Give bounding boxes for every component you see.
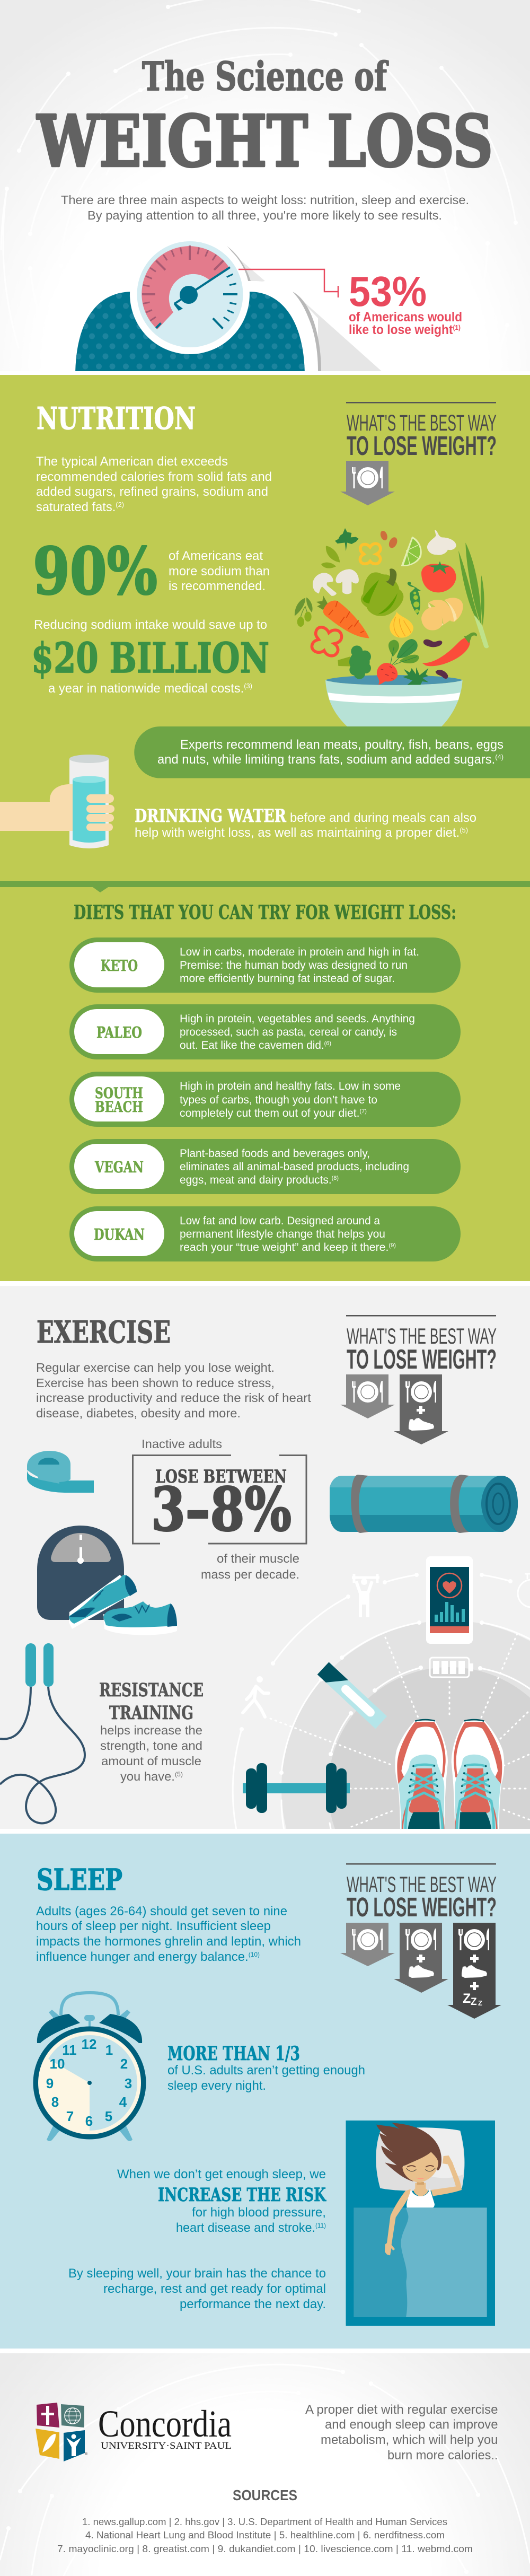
- callout pill: experts recommend: and nuts, while limiting trans fats, sodium and added sugars.: [157, 752, 498, 767]
- text: closing statement: and enough sleep can improve: [325, 2417, 498, 2432]
- text: typical american diet: saturated fats.: [36, 500, 117, 514]
- best way block: step three: Z: [463, 1991, 471, 2006]
- diet card: south beach: BEACH: [95, 1098, 143, 1116]
- text: closing statement: [305, 2403, 498, 2463]
- text: resistance training: [99, 1679, 204, 1783]
- text: typical american diet: added sugars, refined grains, sodium and: [36, 485, 268, 499]
- icon: phone with fitness app: [426, 1556, 473, 1644]
- text: adults sleep hours: Adults (ages 26-64) should get seven to nine: [36, 1904, 287, 1918]
- stat box: lose between 3-8 percent: Inactive adults: [142, 1437, 222, 1451]
- text: drinking water: [135, 805, 476, 840]
- diet card: vegan: VEGAN: [94, 1158, 144, 1176]
- diet card: paleo: (6): [324, 1040, 331, 1047]
- diet card: keto: more efficiently burning fat instead of sugar.: [180, 972, 395, 985]
- text: sleeping well: performance the next day.: [180, 2297, 326, 2311]
- diet card: south beach: completely cut them out of your diet.: [180, 1107, 358, 1119]
- best way block: step two: [340, 1315, 497, 1444]
- text: adults sleep hours: [36, 1904, 301, 1964]
- callout pill: experts recommend: (4): [495, 753, 504, 761]
- icon: weightlifter: [352, 1574, 379, 1617]
- text: resistance training: you have.: [120, 1769, 173, 1783]
- diet card: dukan: permanent lifestyle change that helps you: [180, 1228, 385, 1240]
- icon: alarm clock: 4: [119, 2094, 127, 2110]
- stat box: lose between 3-8 percent: of their muscle: [217, 1552, 299, 1565]
- callout pill: experts recommend: [134, 726, 530, 778]
- callout: 53 percent: of Americans would: [349, 310, 462, 325]
- diet card: dukan: (9): [388, 1242, 396, 1249]
- sources list: 7. mayoclinic.org | 8. greatist.com | 9. dukandiet.com | 10. livescience.com | 11. webmd.com: [57, 2544, 473, 2554]
- icon: alarm clock: 8: [51, 2094, 59, 2110]
- stat: 20 billion: $20 BILLION: [31, 634, 269, 682]
- text: resistance training: amount of muscle: [101, 1754, 201, 1768]
- text: typical american diet: recommended calories from solid fats and: [36, 470, 272, 484]
- panel: footer: [0, 2349, 530, 2576]
- text: adults sleep hours: influence hunger and energy balance.: [36, 1950, 249, 1964]
- text: sleeping well: [68, 2266, 326, 2311]
- heading: nutrition: NUTRITION: [37, 401, 196, 436]
- text: resistance training: (5): [175, 1771, 183, 1778]
- text: resistance training: TRAINING: [109, 1702, 193, 1724]
- callout: 53 percent: (1): [453, 323, 461, 331]
- sources list: 4. National Heart Lung and Blood Institute | 5. healthline.com | 6. nerdfitness.com: [85, 2530, 445, 2540]
- heading: sleep: SLEEP: [37, 1862, 122, 1897]
- icon: hand holding water glass: [0, 755, 114, 848]
- icon: stopwatch: [518, 1574, 530, 1607]
- stat: 20 billion: [31, 618, 269, 696]
- icon: alarm clock: 1: [105, 2042, 113, 2058]
- text: drinking water: before and during meals can also: [290, 811, 476, 825]
- diet card: paleo: out. Eat like the cavemen did.: [180, 1039, 325, 1052]
- stat box: lose between 3-8 percent: LOSE BETWEEN: [155, 1466, 287, 1487]
- text: adults sleep hours: impacts the hormones ghrelin and leptin, which: [36, 1934, 301, 1949]
- stat: 20 billion: a year in nationwide medical costs.: [48, 681, 245, 696]
- text: regular exercise: increase productivity and reduce the risk of heart: [36, 1391, 312, 1405]
- panel: header: [0, 0, 530, 376]
- text: closing statement: burn more calories..: [387, 2448, 498, 2463]
- icon: yoga mat: [330, 1475, 518, 1533]
- stat box: lose between 3-8 percent: 3–8%: [151, 1475, 292, 1545]
- diet card: south beach: (7): [359, 1108, 367, 1115]
- diet card: paleo: PALEO: [96, 1023, 142, 1041]
- diet card: dukan: DUKAN: [94, 1225, 145, 1243]
- icon: alarm clock: 7: [66, 2108, 74, 2124]
- text: drinking water: DRINKING WATER: [135, 805, 287, 827]
- icon: energy bar: [317, 1662, 387, 1729]
- title: The Science of: [142, 54, 388, 100]
- diet card: keto: KETO: [101, 957, 138, 975]
- stat: more than one third: sleep every night.: [167, 2079, 266, 2093]
- text: adults sleep hours: hours of sleep per night. Insufficient sleep: [36, 1919, 271, 1933]
- intro text: [61, 193, 469, 222]
- icon: measuring tape: [27, 1451, 94, 1493]
- logo: Concordia University Saint Paul: [36, 2403, 232, 2461]
- stat: 90 percent: of Americans eat: [169, 549, 263, 563]
- text: resistance training: RESISTANCE: [99, 1679, 204, 1701]
- text: closing statement: metabolism, which will help you: [321, 2433, 498, 2447]
- text: drinking water: (5): [460, 826, 468, 834]
- icon: jump rope: [0, 1643, 85, 1823]
- panel: exercise: [0, 1281, 530, 1957]
- text: resistance training: helps increase the: [100, 1723, 202, 1737]
- stat box: lose between 3-8 percent: [132, 1437, 306, 1581]
- icon: dumbbell: [243, 1763, 350, 1813]
- sources list: 1. news.gallup.com | 2. hhs.gov | 3. U.S. Department of Health and Human Services: [82, 2517, 447, 2527]
- callout: 53 percent: like to lose weight: [349, 322, 463, 337]
- callout: 53 percent: [238, 268, 462, 337]
- diet card: south beach: [69, 1072, 461, 1127]
- panel: nutrition: [0, 371, 530, 1281]
- text: adults sleep hours: (10): [249, 1951, 260, 1958]
- diet card: vegan: eliminates all animal-based products, including: [180, 1161, 409, 1173]
- diet card: paleo: [69, 1004, 461, 1059]
- text: sleeping well: By sleeping well, your brain has the chance to: [68, 2266, 326, 2281]
- text: typical american diet: The typical American diet exceeds: [36, 454, 228, 469]
- diet card: vegan: Plant-based foods and beverages only,: [180, 1147, 370, 1160]
- divider band with notch: [0, 881, 530, 892]
- diet card: keto: Low in carbs, moderate in protein and high in fat.: [180, 946, 419, 958]
- icon: alarm clock: [33, 1993, 146, 2141]
- diet card: south beach: SOUTH: [95, 1084, 143, 1102]
- text: increase the risk: (11): [315, 2222, 326, 2229]
- diet card: dukan: reach your “true weight” and keep it there.: [180, 1241, 386, 1254]
- text: typical american diet: [36, 454, 272, 514]
- title: [36, 54, 493, 183]
- intro text: There are three main aspects to weight loss: nutrition, sleep and exercise.: [61, 193, 469, 207]
- diet card: south beach: types of carbs, though you don’t have to: [180, 1094, 377, 1106]
- heading: exercise: EXERCISE: [37, 1315, 171, 1350]
- text: resistance training: strength, tone and: [100, 1739, 202, 1753]
- text: closing statement: A proper diet with regular exercise: [305, 2403, 498, 2417]
- diet card: vegan: (8): [332, 1175, 339, 1181]
- icon: alarm clock: 3: [125, 2075, 132, 2091]
- diet card: dukan: [69, 1206, 461, 1261]
- icon: runner: [243, 1677, 269, 1717]
- icon: weighing scale and sneakers: [37, 1526, 177, 1635]
- diet card: vegan: eggs, meat and dairy products.: [180, 1174, 332, 1186]
- icon: bathroom scale with dial: [63, 234, 382, 376]
- diet card: south beach: High in protein and healthy fats. Low in some: [180, 1080, 401, 1092]
- best way block: step three: Z: [471, 1996, 477, 2008]
- icon: alarm clock: 10: [50, 2056, 65, 2072]
- icon: alarm clock: 12: [82, 2036, 96, 2052]
- text: regular exercise: [36, 1361, 312, 1420]
- text: increase the risk: When we don’t get enough sleep, we: [117, 2167, 326, 2181]
- text: sleeping well: recharge, rest and get ready for optimal: [103, 2282, 326, 2296]
- text: typical american diet: (2): [116, 501, 124, 509]
- callout: 53 percent: 53%: [349, 268, 427, 315]
- diet card: dukan: Low fat and low carb. Designed around a: [180, 1215, 380, 1227]
- diet card: paleo: processed, such as pasta, cereal or candy, is: [180, 1026, 397, 1038]
- text: increase the risk: for high blood pressure,: [192, 2205, 326, 2220]
- best way block: step three: Z: [478, 1999, 482, 2007]
- illustration: salad bowl with vegetables: [295, 528, 489, 728]
- icon: alarm clock: 5: [105, 2108, 112, 2124]
- text: increase the risk: INCREASE THE RISK: [158, 2184, 326, 2206]
- icon: battery: [430, 1658, 473, 1677]
- icon: alarm clock: 9: [46, 2075, 54, 2091]
- logo: Concordia University Saint Paul: UNIVERSITY·SAINT PAUL: [101, 2440, 232, 2451]
- stat box: lose between 3-8 percent: mass per decade.: [201, 1567, 299, 1581]
- illustration: radial gauge with circles: [233, 1573, 530, 1957]
- diet card: keto: [69, 937, 461, 993]
- icon: alarm clock: 11: [62, 2042, 77, 2058]
- stat: 90 percent: [33, 533, 270, 609]
- text: increase the risk: heart disease and stroke.: [176, 2221, 319, 2235]
- stat: more than one third: [167, 2043, 365, 2093]
- text: regular exercise: Regular exercise can help you lose weight.: [36, 1361, 275, 1374]
- logo: Concordia University Saint Paul: Concordia: [98, 2403, 232, 2445]
- logo: Concordia University Saint Paul: ®: [85, 2452, 88, 2456]
- text: drinking water: help with weight loss, as well as maintaining a proper diet.: [135, 826, 461, 840]
- best way block: step three: [340, 1863, 501, 2019]
- illustration: woman sleeping in bed: [346, 2121, 495, 2326]
- sources list: [57, 2487, 473, 2554]
- stat: 90 percent: more sodium than: [169, 564, 270, 579]
- stat: 20 billion: Reducing sodium intake would save up to: [34, 618, 267, 632]
- sources list: SOURCES: [233, 2487, 297, 2503]
- icon: alarm clock: 6: [85, 2113, 93, 2129]
- icon: sneakers top view: [395, 1720, 504, 1831]
- stat: 20 billion: (3): [244, 682, 252, 690]
- diet card: paleo: High in protein, vegetables and seeds. Anything: [180, 1013, 415, 1025]
- stat: 90 percent: 90%: [33, 533, 157, 609]
- text: regular exercise: disease, diabetes, obesity and more.: [36, 1406, 241, 1420]
- diet card: keto: Premise: the human body was designed to run: [180, 959, 408, 971]
- icon: alarm clock: 2: [120, 2056, 128, 2072]
- panel: sleep: [0, 1829, 530, 2349]
- text: increase the risk: [117, 2167, 326, 2235]
- stat: more than one third: of U.S. adults aren’t getting enough: [167, 2063, 365, 2078]
- intro text: By paying attention to all three, you're more likely to see results.: [87, 208, 442, 222]
- text: regular exercise: Exercise has been shown to reduce stress,: [36, 1376, 275, 1390]
- diet card: vegan: [69, 1139, 461, 1194]
- best way block: step one: [340, 402, 497, 505]
- stat: 90 percent: is recommended.: [169, 579, 266, 593]
- stat: more than one third: MORE THAN 1/3: [167, 2043, 300, 2065]
- callout pill: experts recommend: Experts recommend lean meats, poultry, fish, beans, eggs: [180, 738, 504, 752]
